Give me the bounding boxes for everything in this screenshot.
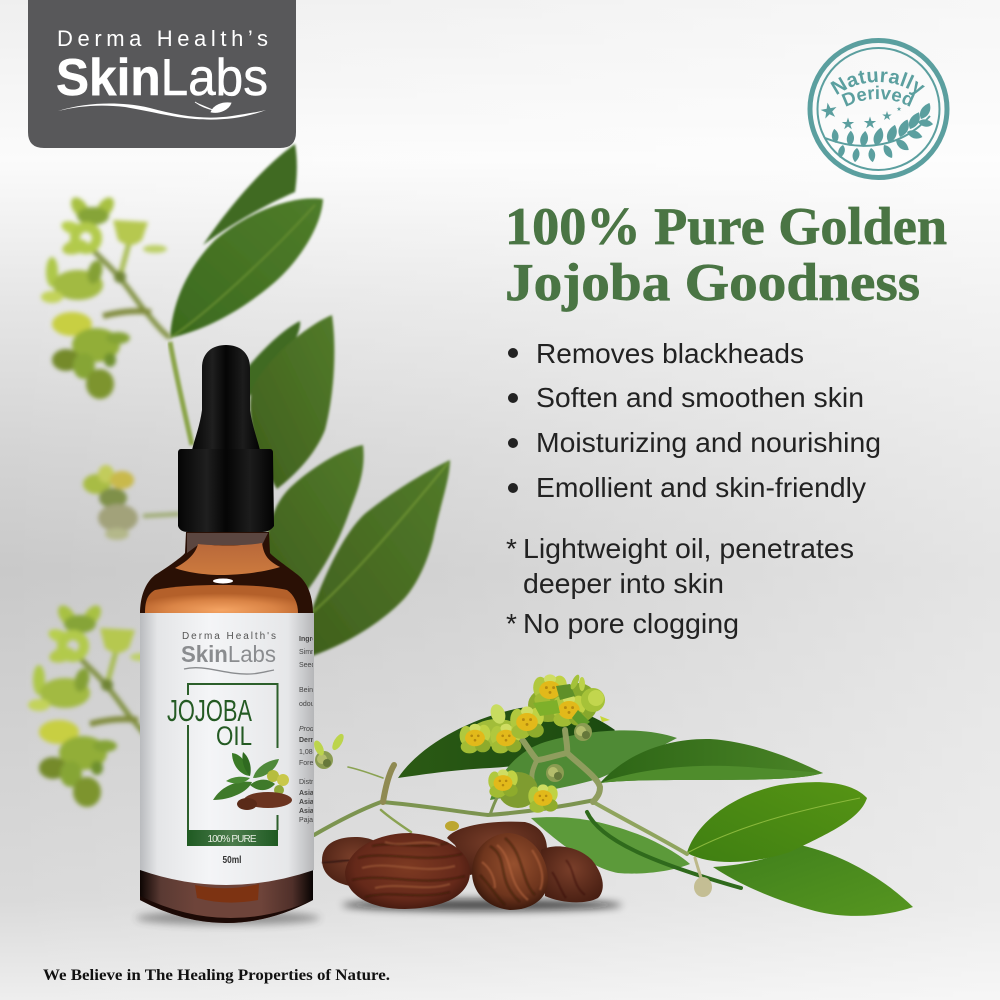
blurred jojoba branch behind the bottle <box>28 144 450 807</box>
sprig flowers <box>312 673 712 897</box>
blurred stem <box>170 342 192 445</box>
footer tagline: We Believe in The Healing Properties of Nature. <box>43 967 390 984</box>
base bottom edge <box>140 896 313 923</box>
sprig leaf lower <box>531 817 690 874</box>
heading <box>505 198 947 312</box>
notes <box>506 533 854 639</box>
label side text: Being a <box>299 687 323 694</box>
label product name <box>167 693 252 751</box>
badge text: Naturally <box>830 70 925 96</box>
label side text: Asia Hill <box>299 790 327 797</box>
logo swoosh <box>58 103 266 120</box>
bottle shadow <box>136 911 320 925</box>
sprig leaf back <box>490 730 677 800</box>
label volume: 50ml <box>222 855 242 866</box>
label side text: Seed Oil <box>299 662 326 669</box>
label brand: SkinLabs <box>181 641 276 667</box>
label side text: Product of <box>299 726 332 733</box>
bottle base <box>140 865 313 923</box>
label band text: 100% PURE <box>208 834 257 845</box>
label side text: Asia Hill <box>299 808 327 815</box>
logo wordmark: SkinLabs <box>56 49 268 107</box>
base oil glow <box>195 884 259 903</box>
glass neck and shoulder <box>140 532 313 614</box>
foreground jojoba sprig <box>312 673 913 916</box>
badge stars <box>820 101 901 129</box>
dropper bulb <box>192 345 260 450</box>
logo tagline: Derma Health’s <box>57 26 268 51</box>
label brand: Derma Health's <box>182 631 276 642</box>
sprig leaf lower right <box>713 845 913 916</box>
label product name: JOJOBA <box>167 693 252 728</box>
notes: * <box>506 608 517 639</box>
label frame <box>188 684 278 846</box>
jojoba seeds <box>322 822 603 910</box>
label green band <box>187 830 278 846</box>
label mini sprig and seeds <box>213 752 292 810</box>
benefits list: Soften and smoothen skin <box>536 382 864 413</box>
benefits list <box>508 338 881 503</box>
blurred flower cluster middle <box>83 465 180 540</box>
logo leaf <box>195 102 231 112</box>
badge: naturally derived <box>808 38 950 180</box>
sprig stems <box>314 730 741 888</box>
benefits list: Emollient and skin-friendly <box>536 472 866 503</box>
benefits list: Removes blackheads <box>536 338 804 369</box>
blurred leaves <box>170 144 450 660</box>
badge branch <box>825 101 933 163</box>
label brand <box>181 631 276 674</box>
label <box>140 613 314 885</box>
badge: naturally derived: Derived <box>842 86 915 107</box>
notes: deeper into skin <box>523 568 724 599</box>
bottle highlight <box>213 578 233 584</box>
label product name: OIL <box>216 721 252 751</box>
label side text <box>299 636 313 824</box>
jojoba seeds shadow <box>342 899 622 911</box>
label side text: odour free <box>299 701 331 708</box>
sprig leaf upper right <box>600 739 823 783</box>
heading: Jojoba Goodness <box>505 254 920 312</box>
notes: * <box>506 533 517 564</box>
dropper collar <box>178 449 274 532</box>
blurred flower cluster upper <box>41 194 170 399</box>
glass neck highlight <box>187 533 268 553</box>
label side text: Asia Hill <box>299 799 327 806</box>
sprig leaf dark <box>398 706 615 778</box>
amber oil body <box>145 585 298 613</box>
label side text: Pajand <box>299 817 321 824</box>
sprig leaf bright <box>687 782 867 862</box>
heading: 100% Pure Golden <box>505 198 947 256</box>
label side text: Simmondsia <box>299 649 338 656</box>
notes: Lightweight oil, penetrates <box>523 533 854 564</box>
bottle <box>136 345 344 925</box>
label side text: Forest <box>299 760 319 767</box>
amber oil shoulder <box>175 543 280 575</box>
logo panel <box>28 0 296 148</box>
benefits list: Moisturizing and nourishing <box>536 427 881 458</box>
label side text: 1,08 Hill <box>299 749 325 756</box>
label side text: Derma Health <box>299 737 344 744</box>
notes: No pore clogging <box>523 608 739 639</box>
label side text: Distributed <box>299 779 333 786</box>
label side text: Ingredients <box>299 636 337 643</box>
blurred flower cluster lower <box>28 602 157 807</box>
